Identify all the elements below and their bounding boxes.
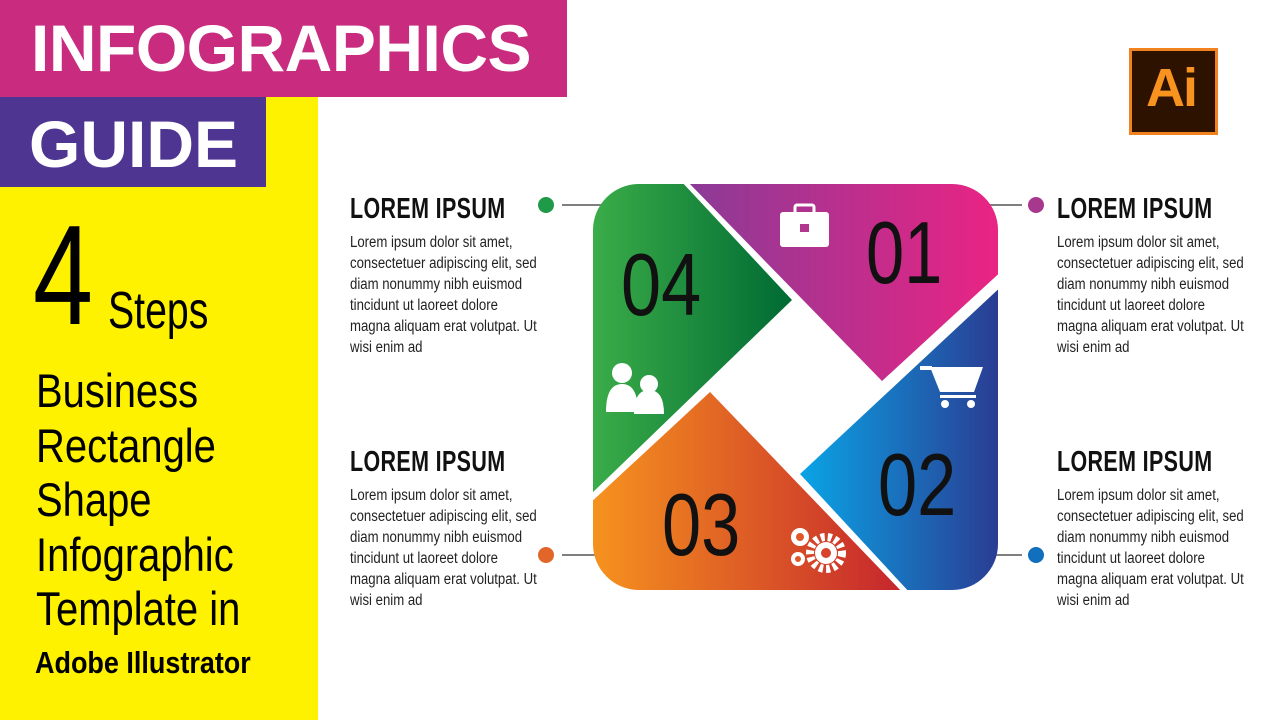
yellow side panel	[0, 97, 318, 720]
subtitle banner: GUIDE: GUIDE	[29, 107, 238, 181]
text block: step 03: Lorem ipsum dolor sit amet,	[350, 487, 513, 504]
text block: step 04: magna aliquam erat volutpat. Ut	[350, 318, 537, 335]
text block: step 03: tincidunt ut laoreet dolore	[350, 550, 498, 567]
text block: step 03: LOREM IPSUM	[350, 446, 505, 478]
text block: step 04	[350, 193, 537, 356]
left description	[36, 364, 240, 635]
text block: step 01: diam nonummy nibh euismod	[1057, 276, 1229, 293]
connector: step 03	[538, 547, 598, 563]
text block: step 03: wisi enim ad	[350, 592, 422, 609]
text block: step 01: wisi enim ad	[1057, 339, 1129, 356]
connector: step 02	[992, 547, 1044, 563]
text block: step 04: wisi enim ad	[350, 339, 422, 356]
left description: Business	[36, 364, 198, 417]
text block: step 04: diam nonummy nibh euismod	[350, 276, 522, 293]
text block: step 01: Lorem ipsum dolor sit amet,	[1057, 234, 1220, 251]
segment 01 pink	[686, 180, 1005, 381]
text block: step 03	[350, 446, 537, 609]
subtitle banner: GUIDE	[0, 97, 266, 187]
number 04: 04	[621, 236, 701, 335]
icon: users	[606, 363, 664, 414]
icon: gears	[791, 528, 842, 569]
text block: step 02: Lorem ipsum dolor sit amet,	[1057, 487, 1220, 504]
text block: step 02: magna aliquam erat volutpat. Ut	[1057, 571, 1244, 588]
title banner: INFOGRAPHICS	[0, 0, 567, 97]
text block: step 01: LOREM IPSUM	[1057, 193, 1212, 225]
text block: step 01	[1057, 193, 1244, 356]
icon: cart	[920, 366, 983, 408]
segment 02 blue	[800, 283, 1005, 594]
text block: step 02: tincidunt ut laoreet dolore	[1057, 550, 1205, 567]
text block: step 04: Lorem ipsum dolor sit amet,	[350, 234, 513, 251]
number 03: 03	[662, 475, 740, 574]
text block: step 01: tincidunt ut laoreet dolore	[1057, 297, 1205, 314]
left description: Template in	[36, 582, 240, 635]
text block: step 04: LOREM IPSUM	[350, 193, 505, 225]
icon: Ai logo	[1129, 48, 1218, 135]
Adobe Illustrator label: Adobe Illustrator	[35, 645, 251, 680]
text block: step 02: wisi enim ad	[1057, 592, 1129, 609]
text block: step 04: consectetuer adipiscing elit, sed	[350, 255, 537, 272]
text block: step 02: diam nonummy nibh euismod	[1057, 529, 1229, 546]
text block: step 02: LOREM IPSUM	[1057, 446, 1212, 478]
text block: step 01: consectetuer adipiscing elit, sed	[1057, 255, 1244, 272]
icon: Ai logo: Ai	[1146, 58, 1196, 118]
left description: Shape	[36, 473, 152, 526]
connector: step 01	[988, 197, 1044, 213]
text block: step 01: magna aliquam erat volutpat. Ut	[1057, 318, 1244, 335]
segment 03 orange	[588, 392, 904, 594]
text block: step 02	[1057, 446, 1244, 609]
text block: step 03: magna aliquam erat volutpat. Ut	[350, 571, 537, 588]
central rectangle infographic	[538, 184, 1044, 590]
connector: step 04	[538, 197, 602, 213]
segment 04 green	[588, 180, 792, 497]
icon: briefcase	[780, 205, 829, 247]
title banner: INFOGRAPHICS: INFOGRAPHICS	[31, 11, 531, 85]
left description: Infographic	[36, 528, 234, 580]
number 01: 01	[866, 204, 942, 302]
text block: step 02: consectetuer adipiscing elit, sed	[1057, 508, 1244, 525]
number 02: 02	[878, 435, 956, 534]
big number 4: 4	[33, 196, 93, 355]
Steps label: Steps	[108, 282, 208, 340]
text block: step 03: consectetuer adipiscing elit, sed	[350, 508, 537, 525]
left description: Rectangle	[36, 418, 216, 472]
text block: step 03: diam nonummy nibh euismod	[350, 529, 522, 546]
text block: step 04: tincidunt ut laoreet dolore	[350, 297, 498, 314]
